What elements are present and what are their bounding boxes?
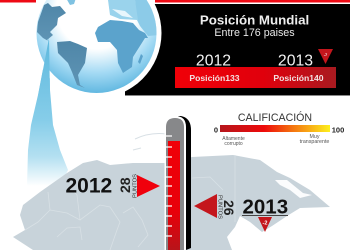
label: Posición133: Posición133	[189, 73, 240, 83]
small islands	[133, 134, 166, 150]
value 26: 26	[221, 200, 237, 216]
year label 2013: 2013	[242, 196, 288, 218]
map of Honduras	[13, 155, 330, 250]
top red bar left	[0, 0, 36, 2]
Europe	[108, 0, 138, 20]
scale maximum: 100	[332, 126, 344, 134]
lagoon	[275, 180, 312, 198]
label: Posición140: Posición140	[273, 73, 324, 83]
arrow	[194, 194, 217, 218]
gradient scale	[220, 125, 330, 132]
legend title: CALIFICACIÓN	[238, 111, 312, 124]
year 2013: 2013	[278, 52, 313, 70]
label: Altamente corrupto: corrupto	[224, 141, 243, 147]
label: Altamente corrupto: Altamente	[222, 136, 245, 142]
Asia edge	[135, 0, 156, 36]
icon: globe	[32, 0, 162, 98]
value 28: 28	[117, 177, 133, 193]
North America	[37, 3, 66, 42]
marker: 2012	[66, 174, 160, 198]
legend: calificación	[214, 111, 344, 147]
label: Muy transparente: transparente	[300, 139, 329, 145]
arrow	[137, 175, 160, 197]
Africa and Arabia	[95, 20, 148, 73]
label PUNTOS: PUNTOS	[216, 195, 222, 219]
icon: down triangle -7	[318, 49, 333, 64]
marker: 2013	[194, 194, 288, 232]
year 2012: 2012	[196, 52, 231, 70]
position bar	[175, 67, 336, 88]
internal department borders	[25, 155, 235, 250]
label PUNTOS: PUNTOS	[132, 174, 138, 198]
beam from globe to map	[27, 38, 68, 186]
icon: down triangle -2: -2	[263, 220, 267, 226]
icon: down triangle -7: -7	[324, 52, 328, 57]
beam over globe	[38, 38, 50, 96]
label: Muy transparente: Muy	[309, 134, 320, 140]
top red bar right	[155, 0, 350, 2]
Madagascar	[138, 54, 143, 64]
heading: Posición Mundial: Posición Mundial	[200, 12, 309, 28]
subheading: Entre 176 paises: Entre 176 paises	[214, 27, 295, 39]
Greenland	[67, 0, 76, 5]
scale minimum: 0	[214, 126, 218, 134]
thermometer	[163, 116, 191, 250]
scale ticks	[163, 136, 172, 236]
panel: world position	[125, 4, 350, 96]
South America	[57, 41, 87, 88]
year label 2012: 2012	[66, 174, 112, 198]
